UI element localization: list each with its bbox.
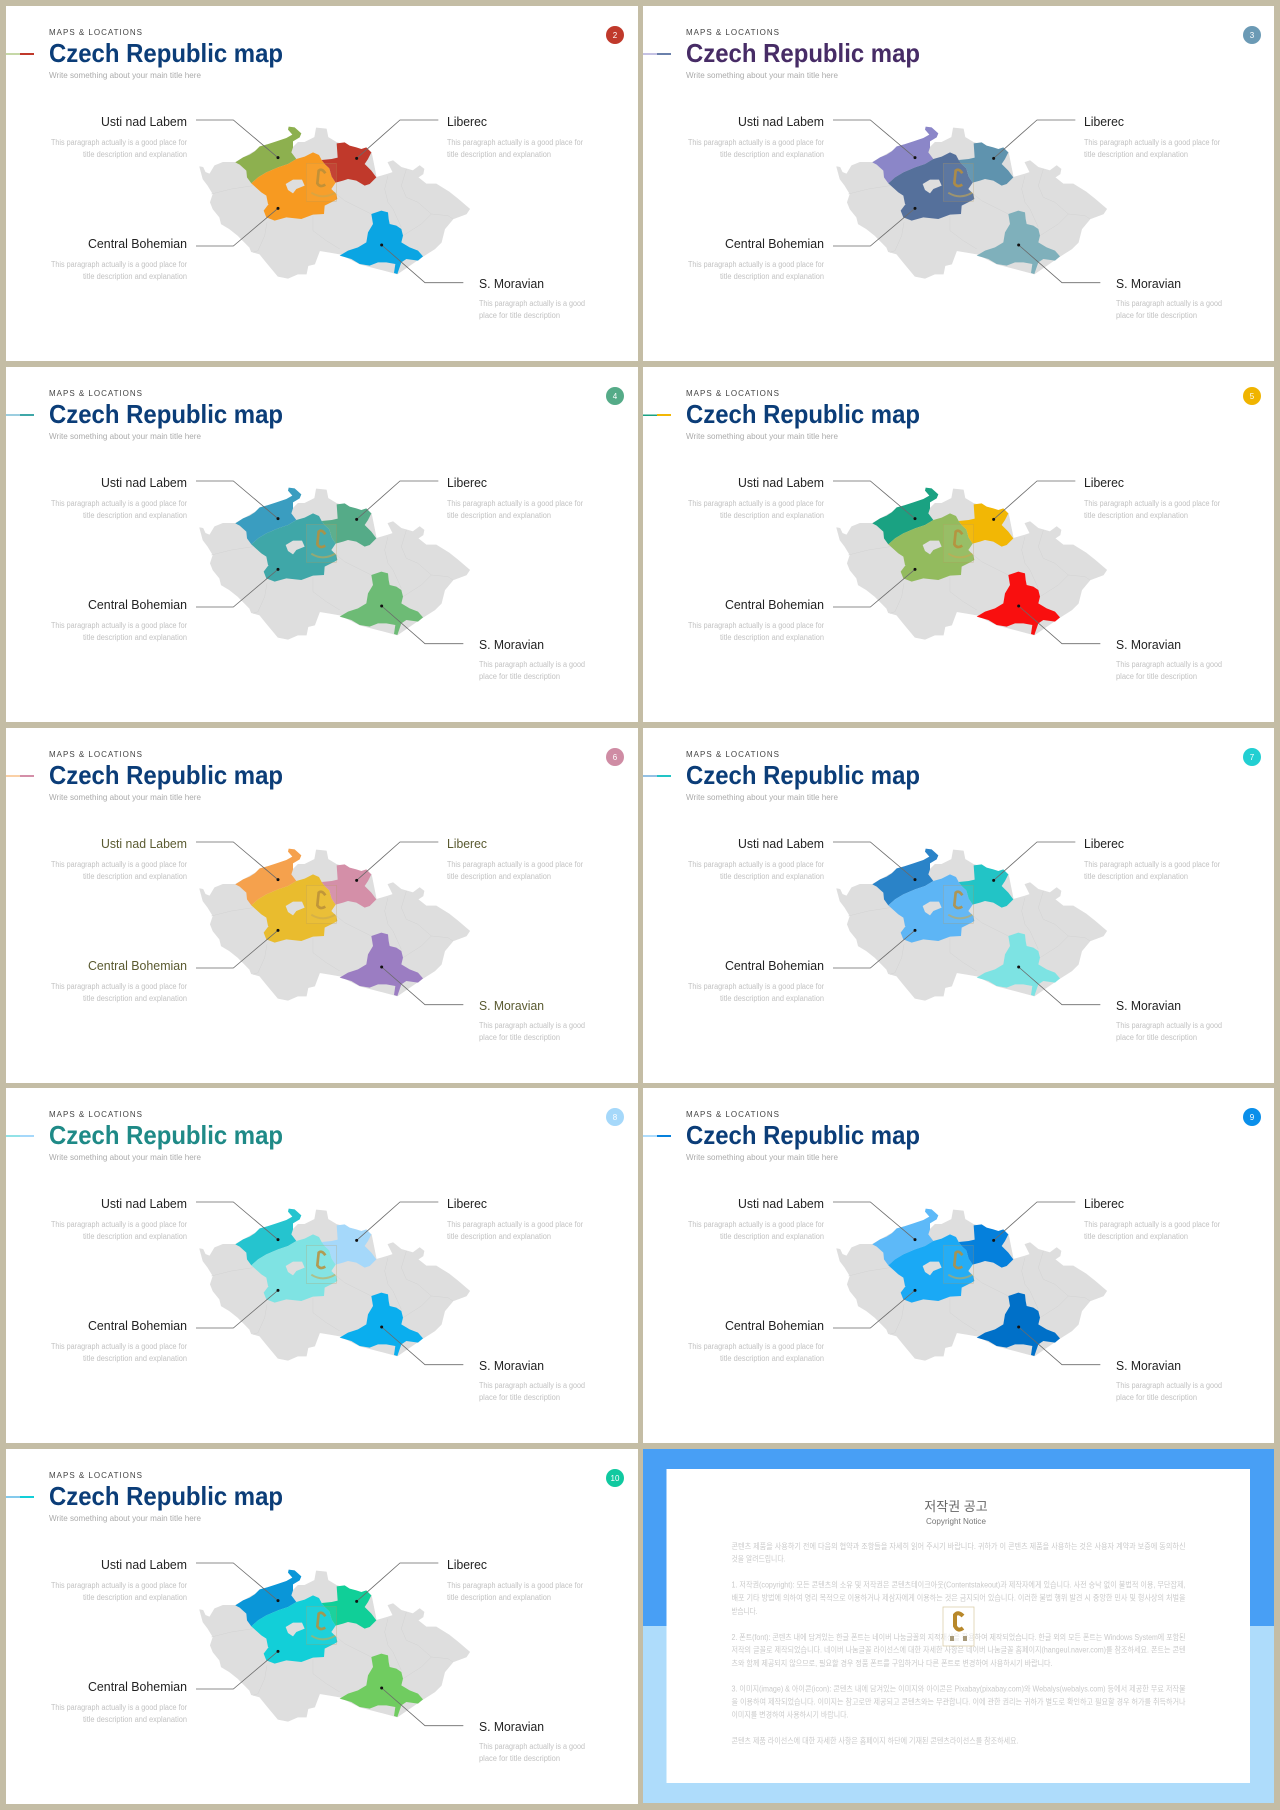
panel: slide 8: [6, 1088, 638, 1443]
subtitle: Write something about your main title here: [686, 70, 838, 80]
page badge: 6: [613, 753, 618, 762]
subtitle: Write something about your main title here: [686, 792, 838, 802]
map: [833, 481, 1107, 644]
page badge: 2: [613, 31, 618, 40]
callout: Central Bohemian: title description and explanation: [720, 1354, 824, 1363]
callout: Liberec: title description and explanation: [447, 150, 551, 159]
callout: Liberec: This paragraph actually is a good place for: [447, 499, 583, 508]
callout: S. Moravian: This paragraph actually is a good: [479, 1021, 585, 1030]
callout: Liberec: [447, 114, 583, 159]
copyright body text: 받습니다.: [732, 1606, 758, 1616]
callout: S. Moravian: This paragraph actually is a good: [479, 1742, 585, 1751]
callout: Central Bohemian: This paragraph actually is a good place for: [51, 1703, 187, 1712]
callout: Liberec: title description and explanation: [447, 1593, 551, 1602]
callout: Liberec: title description and explanation: [447, 511, 551, 520]
accent line: [643, 775, 671, 777]
page badge: [1243, 748, 1261, 766]
callout: S. Moravian: place for title description: [479, 311, 560, 320]
callout: Central Bohemian: [688, 958, 824, 1003]
page badge: 10: [611, 1474, 620, 1483]
copyright heading: [924, 1499, 988, 1526]
callout: Central Bohemian: This paragraph actually is a good place for: [51, 982, 187, 991]
callout: Central Bohemian: [688, 597, 824, 642]
callout: Liberec: title description and explanation: [1084, 1232, 1188, 1241]
panel: copyright notice: [643, 1449, 1274, 1803]
title: Czech Republic map: [686, 760, 920, 790]
page badge: [1243, 26, 1261, 44]
callout: S. Moravian: This paragraph actually is a good: [479, 299, 585, 308]
page badge: 8: [613, 1113, 618, 1122]
page badge: [606, 26, 624, 44]
map: [833, 1202, 1107, 1365]
callout: Usti nad Labem: This paragraph actually is a good place for: [688, 138, 824, 147]
callout: Liberec: This paragraph actually is a good place for: [1084, 1220, 1220, 1229]
callout: S. Moravian: This paragraph actually is a good: [1116, 299, 1222, 308]
callout: Usti nad Labem: [51, 836, 187, 881]
callout: Usti nad Labem: [51, 1196, 187, 1241]
watermark logo: [943, 1607, 974, 1646]
panel: slide 10: [6, 1449, 638, 1804]
callout: Central Bohemian: Central Bohemian: [725, 236, 824, 251]
callout: Usti nad Labem: title description and explanation: [720, 511, 824, 520]
callout: Central Bohemian: title description and explanation: [720, 994, 824, 1003]
callout: Central Bohemian: title description and explanation: [83, 633, 187, 642]
callout: Usti nad Labem: [51, 114, 187, 159]
page badge: [606, 387, 624, 405]
callout: Central Bohemian: title description and explanation: [83, 272, 187, 281]
callout: Liberec: Liberec: [447, 1196, 487, 1211]
callout: Central Bohemian: Central Bohemian: [725, 1318, 824, 1333]
accent line: [643, 414, 671, 416]
callout: Central Bohemian: [51, 236, 187, 281]
callout: Liberec: This paragraph actually is a good place for: [447, 1581, 583, 1590]
callout: S. Moravian: [1116, 276, 1222, 320]
callout: S. Moravian: S. Moravian: [1116, 998, 1181, 1013]
callout: Usti nad Labem: This paragraph actually is a good place for: [688, 1220, 824, 1229]
eyebrow: MAPS & LOCATIONS: [49, 389, 142, 398]
callout: S. Moravian: [1116, 637, 1222, 681]
callout: Liberec: Liberec: [1084, 114, 1124, 129]
callout: Liberec: [447, 1196, 583, 1241]
callout: S. Moravian: [479, 1719, 585, 1763]
callout: Liberec: This paragraph actually is a good place for: [447, 860, 583, 869]
map: [196, 481, 470, 644]
page badge: 4: [613, 392, 618, 401]
callout: S. Moravian: [479, 1358, 585, 1402]
copyright body text: 2. 폰트(font): 콘텐츠 내에 담겨있는 한글 폰트는 네이버 나눔글꼴의 지적재산을 활용하여 제작되었습니다. 한글 외의 모든 폰트는 Windows System에 포함된: [732, 1632, 1186, 1642]
callout: S. Moravian: place for title description: [479, 1393, 560, 1402]
callout: S. Moravian: [479, 276, 585, 320]
callout: Usti nad Labem: Usti nad Labem: [738, 475, 824, 490]
callout: S. Moravian: This paragraph actually is a good: [479, 1381, 585, 1390]
eyebrow: MAPS & LOCATIONS: [49, 1110, 142, 1119]
eyebrow: MAPS & LOCATIONS: [686, 389, 779, 398]
callout: S. Moravian: This paragraph actually is a good: [1116, 660, 1222, 669]
title: Czech Republic map: [49, 399, 283, 429]
callout: Usti nad Labem: title description and explanation: [83, 872, 187, 881]
callout: Usti nad Labem: title description and explanation: [83, 1593, 187, 1602]
callout: Central Bohemian: This paragraph actually is a good place for: [688, 260, 824, 269]
callout: S. Moravian: [1116, 998, 1222, 1042]
page badge: [606, 748, 624, 766]
callout: Central Bohemian: Central Bohemian: [725, 597, 824, 612]
callout: Central Bohemian: Central Bohemian: [88, 1318, 187, 1333]
callout: Central Bohemian: Central Bohemian: [88, 236, 187, 251]
accent line: [6, 1496, 34, 1498]
callout: Liberec: title description and explanation: [1084, 150, 1188, 159]
callout: Central Bohemian: Central Bohemian: [725, 958, 824, 973]
page badge: 5: [1250, 392, 1255, 401]
callout: Central Bohemian: title description and explanation: [83, 994, 187, 1003]
accent line: [643, 1135, 671, 1137]
callout: Central Bohemian: This paragraph actually is a good place for: [688, 1342, 824, 1351]
panel: slide 5: [643, 367, 1274, 722]
callout: Central Bohemian: This paragraph actually is a good place for: [51, 260, 187, 269]
callout: Usti nad Labem: Usti nad Labem: [101, 836, 187, 851]
panel: slide 3: [643, 6, 1274, 361]
callout: Liberec: Liberec: [447, 836, 487, 851]
callout: Central Bohemian: This paragraph actually is a good place for: [51, 1342, 187, 1351]
callout: Liberec: This paragraph actually is a good place for: [447, 1220, 583, 1229]
title: Czech Republic map: [49, 1481, 283, 1511]
page badge: 7: [1250, 753, 1255, 762]
callout: Usti nad Labem: title description and explanation: [720, 1232, 824, 1241]
callout: Central Bohemian: This paragraph actually is a good place for: [688, 621, 824, 630]
title: Czech Republic map: [49, 760, 283, 790]
accent line: [6, 1135, 34, 1137]
panel: slide 2: [6, 6, 638, 361]
callout: Usti nad Labem: This paragraph actually is a good place for: [51, 499, 187, 508]
callout: S. Moravian: S. Moravian: [479, 998, 544, 1013]
callout: S. Moravian: [1116, 1358, 1222, 1402]
callout: Usti nad Labem: [51, 1557, 187, 1602]
callout: S. Moravian: S. Moravian: [479, 637, 544, 652]
callout: Usti nad Labem: This paragraph actually is a good place for: [51, 1581, 187, 1590]
callout: Liberec: Liberec: [447, 1557, 487, 1572]
callout: S. Moravian: [479, 998, 585, 1042]
callout: Usti nad Labem: Usti nad Labem: [738, 836, 824, 851]
copyright body text: 츠와 함께 제공되지 않으므로, 필요할 경우 정품 폰트를 구입하거나 다른 폰트로 변경하여 사용하시기 바랍니다.: [732, 1658, 1052, 1668]
title: Czech Republic map: [686, 1120, 920, 1150]
copyright body text: 이미지를 변경하여 사용하시기 바랍니다.: [732, 1710, 848, 1720]
callout: Usti nad Labem: title description and explanation: [720, 872, 824, 881]
eyebrow: MAPS & LOCATIONS: [49, 750, 142, 759]
callout: Usti nad Labem: title description and explanation: [83, 150, 187, 159]
title: Czech Republic map: [49, 1120, 283, 1150]
title: Czech Republic map: [686, 399, 920, 429]
callout: Usti nad Labem: [688, 1196, 824, 1241]
callout: S. Moravian: This paragraph actually is a good: [1116, 1381, 1222, 1390]
callout: Usti nad Labem: Usti nad Labem: [738, 114, 824, 129]
callout: Central Bohemian: [688, 1318, 824, 1363]
callout: Usti nad Labem: title description and explanation: [83, 1232, 187, 1241]
callout: Usti nad Labem: Usti nad Labem: [101, 1196, 187, 1211]
callout: Usti nad Labem: Usti nad Labem: [101, 475, 187, 490]
title: Czech Republic map: [49, 38, 283, 68]
subtitle: Write something about your main title here: [49, 431, 201, 441]
callout: S. Moravian: place for title description: [1116, 1033, 1197, 1042]
copyright heading: Copyright Notice: [926, 1516, 986, 1526]
eyebrow: MAPS & LOCATIONS: [49, 28, 142, 37]
callout: Central Bohemian: [688, 236, 824, 281]
callout: Liberec: title description and explanation: [447, 1232, 551, 1241]
callout: Liberec: title description and explanation: [1084, 872, 1188, 881]
copyright body text: 1. 저작권(copyright): 모든 콘텐츠의 소유 및 저작권은 콘텐츠테이크아웃(Contentstakeout)과 제작자에게 있습니다. 사전 승낙 없이 불법적 이용, 무단잡제,: [732, 1580, 1186, 1590]
callout: Usti nad Labem: Usti nad Labem: [101, 114, 187, 129]
panel: slide 4: [6, 367, 638, 722]
panel: slide 7: [643, 728, 1274, 1083]
callout: Liberec: This paragraph actually is a good place for: [1084, 499, 1220, 508]
eyebrow: MAPS & LOCATIONS: [686, 750, 779, 759]
copyright body text: 저작의 글꼴로 제작되었습니다. 네이버 나눔글꼴 라이선스에 대한 자세한 사항은 네이버 나눔글꼴 홈페이지(hangeul.naver.com)를 참조하세요. 폰트는 콘텐: [732, 1644, 1186, 1654]
title: Czech Republic map: [686, 38, 920, 68]
callout: Usti nad Labem: title description and explanation: [720, 150, 824, 159]
copyright body text: 것을 알려드립니다.: [732, 1554, 786, 1564]
callout: Liberec: This paragraph actually is a good place for: [1084, 138, 1220, 147]
map: [833, 842, 1107, 1005]
map: [833, 120, 1107, 283]
callout: Usti nad Labem: [688, 836, 824, 881]
callout: Usti nad Labem: This paragraph actually is a good place for: [51, 138, 187, 147]
subtitle: Write something about your main title here: [686, 1152, 838, 1162]
callout: Liberec: This paragraph actually is a good place for: [447, 138, 583, 147]
callout: S. Moravian: place for title description: [1116, 1393, 1197, 1402]
callout: Central Bohemian: [51, 958, 187, 1003]
map: [196, 1202, 470, 1365]
callout: Liberec: [447, 475, 583, 520]
callout: Liberec: [1084, 114, 1220, 159]
callout: Central Bohemian: Central Bohemian: [88, 1679, 187, 1694]
page badge: 3: [1250, 31, 1255, 40]
callout: Central Bohemian: title description and explanation: [720, 633, 824, 642]
callout: Liberec: Liberec: [1084, 1196, 1124, 1211]
callout: Usti nad Labem: [688, 475, 824, 520]
accent line: [6, 414, 34, 416]
copyright body text: 3. 이미지(image) & 아이콘(icon): 콘텐츠 내에 담겨있는 이미지와 아이콘은 Pixabay(pixabay.com)와 Webalys(webalys.com) 등에서 제공한 무료 저작물: [732, 1684, 1186, 1694]
callout: S. Moravian: This paragraph actually is a good: [479, 660, 585, 669]
callout: S. Moravian: S. Moravian: [1116, 637, 1181, 652]
copyright body text: 을 이용하여 제작되었습니다. 이미지는 참고로만 제공되고 콘텐츠와는 무관합니다. 이에 관한 권리는 귀하가 별도로 확인하고 필요할 경우 허가를 취득하거나: [732, 1696, 1186, 1706]
copyright body text: 콘텐츠 제품을 사용하기 전에 다음의 협약과 조항들을 자세히 읽어 주시기 바랍니다. 귀하가 이 콘텐츠 제품을 사용하는 것은 사용자 계약과 보증에 동의하신: [732, 1541, 1186, 1551]
callout: Central Bohemian: [51, 597, 187, 642]
callout: Central Bohemian: [51, 1318, 187, 1363]
callout: S. Moravian: place for title description: [1116, 311, 1197, 320]
callout: Liberec: Liberec: [1084, 836, 1124, 851]
copyright body text: [732, 1541, 1186, 1746]
panel: slide 6: [6, 728, 638, 1083]
callout: Liberec: [1084, 836, 1220, 881]
callout: Central Bohemian: title description and explanation: [83, 1715, 187, 1724]
callout: Liberec: [1084, 475, 1220, 520]
callout: Central Bohemian: This paragraph actually is a good place for: [51, 621, 187, 630]
eyebrow: MAPS & LOCATIONS: [686, 1110, 779, 1119]
copyright body text: 배포 기타 방법에 의하여 영리 목적으로 이용하거나 제삼자에게 이용하는 것은 금지되어 있습니다. 이러한 불법 행위 발견 시 중앙한 민사 및 형사상의 처벌을: [732, 1592, 1186, 1602]
callout: S. Moravian: place for title description: [1116, 672, 1197, 681]
callout: Liberec: Liberec: [447, 475, 487, 490]
copyright body text: 콘텐츠 제품 라이선스에 대한 자세한 사항은 홈페이지 하단에 기재된 콘텐츠라이선스를 참조하세요.: [732, 1736, 1018, 1746]
copyright heading: 저작권 공고: [924, 1499, 988, 1514]
accent line: [643, 53, 671, 55]
subtitle: Write something about your main title here: [49, 792, 201, 802]
page badge: [606, 1108, 624, 1126]
page badge: 9: [1250, 1113, 1255, 1122]
eyebrow: MAPS & LOCATIONS: [686, 28, 779, 37]
callout: Liberec: title description and explanation: [447, 872, 551, 881]
callout: Liberec: [447, 836, 583, 881]
callout: Central Bohemian: Central Bohemian: [88, 597, 187, 612]
eyebrow: MAPS & LOCATIONS: [49, 1471, 142, 1480]
callout: Usti nad Labem: Usti nad Labem: [101, 1557, 187, 1572]
callout: S. Moravian: S. Moravian: [1116, 1358, 1181, 1373]
map: [196, 1563, 470, 1726]
callout: Central Bohemian: Central Bohemian: [88, 958, 187, 973]
callout: Usti nad Labem: [51, 475, 187, 520]
callout: Liberec: Liberec: [447, 114, 487, 129]
callout: Liberec: Liberec: [1084, 475, 1124, 490]
callout: Liberec: [1084, 1196, 1220, 1241]
map: [196, 842, 470, 1005]
accent line: [6, 53, 34, 55]
callout: S. Moravian: S. Moravian: [1116, 276, 1181, 291]
page badge: [606, 1469, 624, 1487]
callout: Liberec: title description and explanation: [1084, 511, 1188, 520]
callout: Usti nad Labem: [688, 114, 824, 159]
callout: Central Bohemian: title description and explanation: [83, 1354, 187, 1363]
callout: Central Bohemian: title description and explanation: [720, 272, 824, 281]
callout: Usti nad Labem: This paragraph actually is a good place for: [688, 860, 824, 869]
callout: Usti nad Labem: title description and explanation: [83, 511, 187, 520]
subtitle: Write something about your main title here: [686, 431, 838, 441]
callout: S. Moravian: S. Moravian: [479, 276, 544, 291]
callout: Liberec: [447, 1557, 583, 1602]
panel: slide 9: [643, 1088, 1274, 1443]
callout: Usti nad Labem: This paragraph actually is a good place for: [51, 1220, 187, 1229]
callout: S. Moravian: S. Moravian: [479, 1358, 544, 1373]
subtitle: Write something about your main title here: [49, 70, 201, 80]
callout: Central Bohemian: [51, 1679, 187, 1724]
callout: Central Bohemian: This paragraph actually is a good place for: [688, 982, 824, 991]
page badge: [1243, 1108, 1261, 1126]
page badge: [1243, 387, 1261, 405]
subtitle: Write something about your main title here: [49, 1513, 201, 1523]
subtitle: Write something about your main title here: [49, 1152, 201, 1162]
callout: S. Moravian: place for title description: [479, 1033, 560, 1042]
callout: S. Moravian: place for title description: [479, 1754, 560, 1763]
accent line: [6, 775, 34, 777]
map: [196, 120, 470, 283]
callout: S. Moravian: S. Moravian: [479, 1719, 544, 1734]
callout: Usti nad Labem: Usti nad Labem: [738, 1196, 824, 1211]
callout: Liberec: This paragraph actually is a good place for: [1084, 860, 1220, 869]
callout: Usti nad Labem: This paragraph actually is a good place for: [688, 499, 824, 508]
callout: S. Moravian: place for title description: [479, 672, 560, 681]
callout: Usti nad Labem: This paragraph actually is a good place for: [51, 860, 187, 869]
callout: S. Moravian: [479, 637, 585, 681]
callout: S. Moravian: This paragraph actually is a good: [1116, 1021, 1222, 1030]
